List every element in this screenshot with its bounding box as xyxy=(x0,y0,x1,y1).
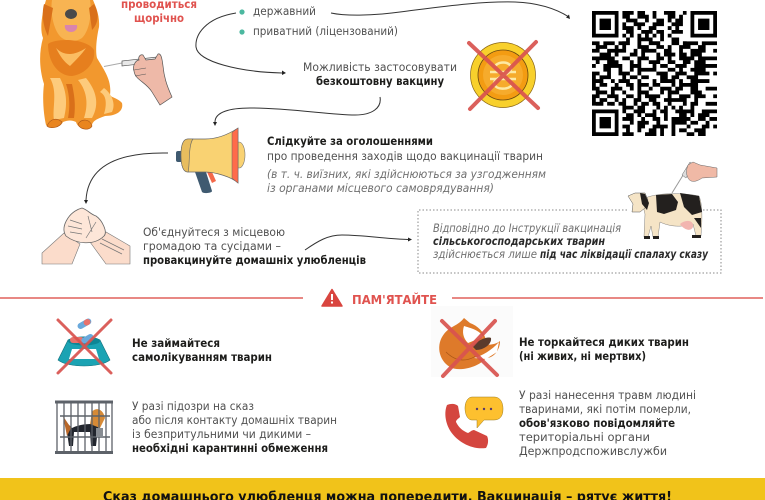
text: report injuries: територіальні органи xyxy=(519,430,650,444)
callout: livestock vaccination: під час ліквідації спалаху сказу xyxy=(540,247,708,261)
heading: remember xyxy=(0,290,763,307)
icon: crossed-out fox xyxy=(431,306,513,377)
text: follow announcements: із органами місцевого самоврядування) xyxy=(267,181,494,195)
text: do not touch wild animals xyxy=(519,335,689,363)
footer banner xyxy=(0,478,765,500)
QR code xyxy=(592,11,717,136)
text: free vaccine: Можливість застосовувати xyxy=(303,60,457,74)
callout: livestock vaccination: сільськогосподарських тварин xyxy=(433,234,605,248)
icon: crossed-out pills in a bowl xyxy=(58,317,111,373)
text: report injuries: У разі нанесення травм людині xyxy=(519,388,696,402)
text: follow announcements xyxy=(267,134,546,195)
heading: conducted annually xyxy=(121,0,197,25)
heading: remember: ПАМ'ЯТАЙТЕ xyxy=(352,292,437,307)
text: report injuries xyxy=(519,388,696,458)
text: free vaccine: безкоштовну вакцину xyxy=(316,74,444,88)
arrow: to livestock note xyxy=(305,235,412,250)
text: follow announcements: (в т. ч. виїзних, які здійснюються за узгодженням xyxy=(267,167,546,181)
text: report injuries: тваринами, які потім померли, xyxy=(519,402,691,416)
list: clinic types: приватний (ліцензований) xyxy=(253,24,398,38)
text: unite with community: громадою та сусідами – xyxy=(143,239,281,253)
callout: livestock vaccination xyxy=(418,210,721,273)
arrow: list to free vaccine xyxy=(196,13,286,75)
icon: hand with syringe xyxy=(104,54,172,105)
text: unite with community: Об'єднуйтеся з місцевою xyxy=(143,225,285,239)
text: follow announcements: про проведення заходів щодо вакцинації тварин xyxy=(267,149,543,163)
text: report injuries: обов'язково повідомляйте xyxy=(519,416,675,430)
icon: crossed-out coin xyxy=(469,42,538,109)
icon: cow with syringe xyxy=(628,162,717,239)
text: report injuries: Держпродспоживслужби xyxy=(519,444,667,458)
text: quarantine: або після контакту домашніх тварин xyxy=(132,413,337,427)
text: free vaccine xyxy=(303,60,457,88)
text: unite with community: провакцинуйте домашніх улюбленців xyxy=(143,253,366,267)
arrow: megaphone to handshake xyxy=(84,153,168,204)
icon: caged dog xyxy=(55,402,113,453)
text: do not touch wild animals: Не торкайтеся диких тварин xyxy=(519,335,689,349)
text: no self-treatment: Не займайтеся xyxy=(132,336,220,350)
callout: livestock vaccination: здійснюється лише xyxy=(433,247,537,261)
list: clinic types xyxy=(239,4,398,38)
text: follow announcements: Слідкуйте за оголошеннями xyxy=(267,134,433,148)
text: quarantine: із безпритульними чи дикими – xyxy=(132,427,311,441)
heading: conducted annually: щорічно xyxy=(134,11,184,25)
text: no self-treatment xyxy=(132,336,272,364)
arrow: list to QR code xyxy=(331,2,570,19)
icon: golden dog xyxy=(40,0,122,129)
icon: phone with speech bubble xyxy=(445,397,503,448)
text: unite with community xyxy=(143,225,366,267)
list: clinic types: державний xyxy=(253,4,316,18)
text: quarantine xyxy=(132,399,337,455)
arrow: free vaccine to megaphone xyxy=(213,97,380,126)
icon: clasped hands xyxy=(42,208,130,264)
callout: livestock vaccination: Відповідно до Інструкції вакцинація xyxy=(433,221,621,235)
text: quarantine: У разі підозри на сказ xyxy=(132,399,254,413)
text: no self-treatment: самолікуванням тварин xyxy=(132,350,272,364)
text: quarantine: необхідні карантинні обмеження xyxy=(132,441,328,455)
icon: megaphone xyxy=(176,128,245,193)
text: do not touch wild animals: (ні живих, ні мертвих) xyxy=(519,349,646,363)
